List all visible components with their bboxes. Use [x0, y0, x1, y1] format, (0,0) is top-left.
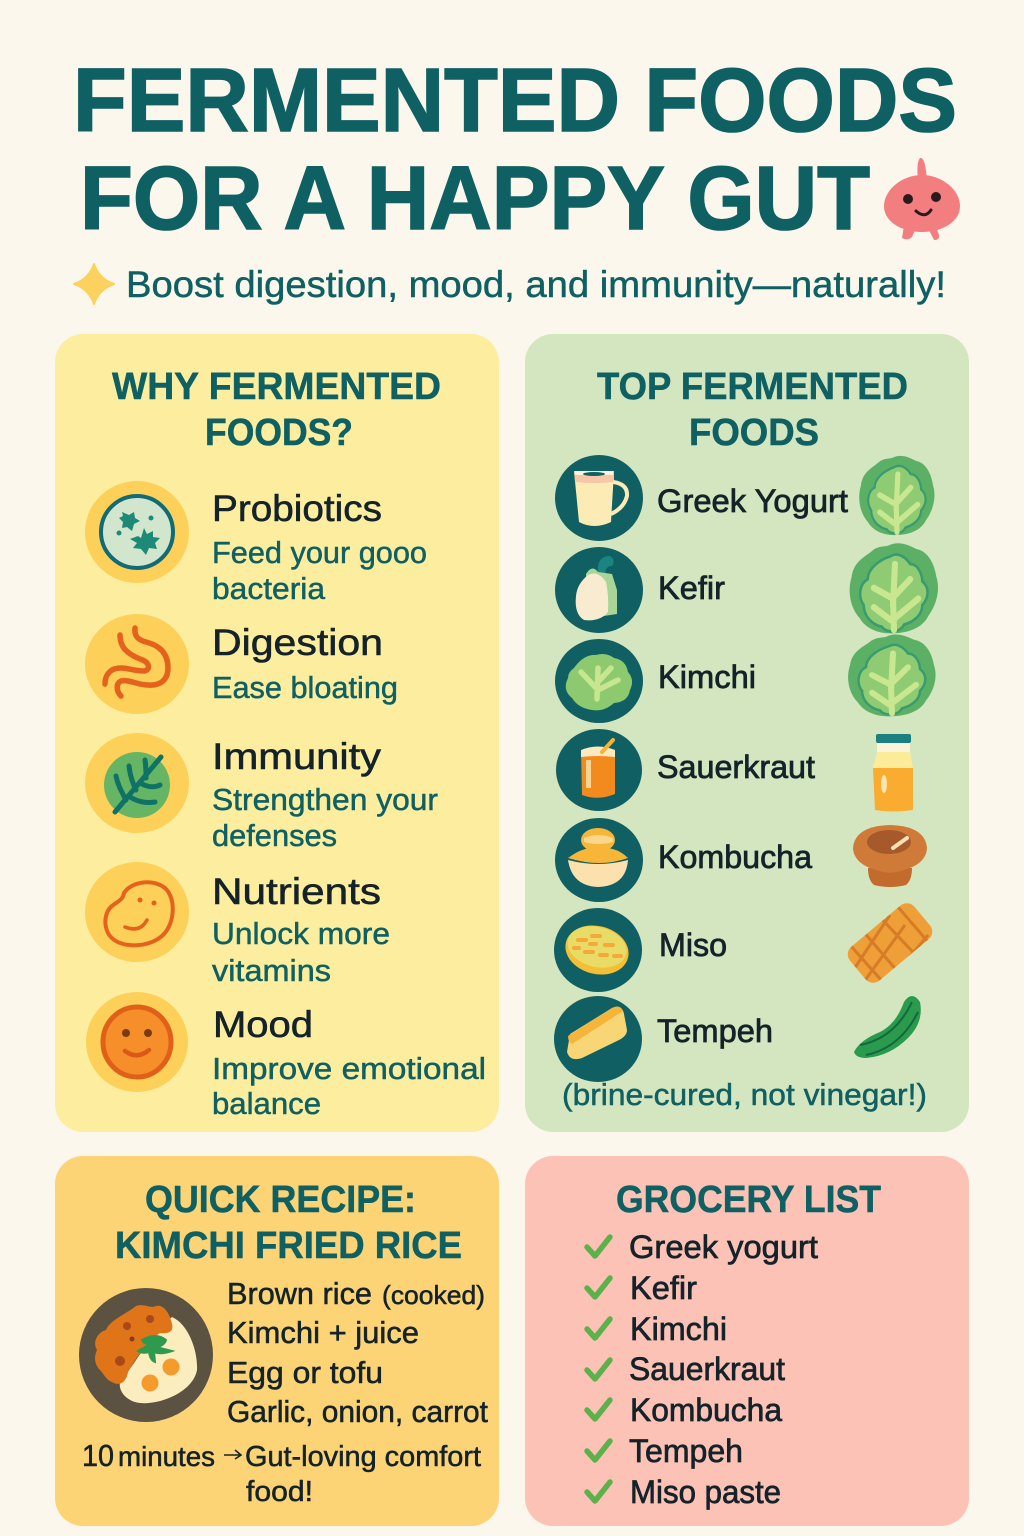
recipe note: food! [246, 1476, 313, 1508]
label: kombucha: Kombucha [658, 839, 812, 875]
text: immunity: defenses [212, 818, 337, 853]
text: probiotics: Feed your gooo [212, 535, 427, 570]
heading: top fermented foods [597, 366, 908, 454]
item: kefir [587, 1270, 697, 1306]
text: nutrients: vitamins [212, 953, 331, 988]
heading: why fermented foods: FOODS? [205, 412, 353, 454]
icon: clay mortar [853, 825, 927, 887]
panel: why fermented foods [55, 334, 499, 1132]
icon: kimchi fried rice plate [79, 1288, 213, 1422]
icon: kombucha bowl [555, 818, 643, 902]
ingredient list: Egg or tofu [227, 1355, 383, 1390]
recipe note: minutes [118, 1441, 215, 1472]
text: digestion [212, 622, 398, 705]
icon: cabbage [859, 456, 934, 535]
ingredient list [227, 1276, 488, 1429]
icon: kimchi cabbage [555, 639, 643, 723]
item: kimchi [587, 1311, 727, 1347]
icon: probiotics petri dish [85, 481, 189, 583]
text: immunity [212, 736, 438, 853]
icon: pickle [854, 996, 921, 1058]
heading: top fermented foods: FOODS [689, 412, 819, 454]
item: miso paste: Miso paste [630, 1474, 781, 1510]
text: mood [212, 1004, 486, 1121]
icon: jar [873, 734, 913, 812]
icon: tempeh block [848, 903, 932, 983]
title: FOR A HAPPY GUT [80, 149, 870, 249]
text: nutrients: Unlock more [212, 916, 390, 951]
text: digestion: Ease bloating [212, 670, 398, 705]
note: brine-cured: (brine-cured, not vinegar!) [562, 1077, 927, 1112]
label: tempeh: Tempeh [657, 1013, 773, 1049]
text: probiotics: Probiotics [212, 488, 382, 529]
panel: grocery list [525, 1156, 969, 1526]
item: sauerkraut: Sauerkraut [629, 1351, 785, 1387]
item: tempeh: Tempeh [629, 1433, 743, 1469]
icon: cabbage [848, 635, 936, 716]
label: miso: Miso [659, 927, 727, 963]
icon: sparkle [74, 264, 114, 304]
icon: cabbage [850, 543, 938, 633]
icon: kefir bottles [555, 547, 643, 633]
text: nutrients [212, 871, 390, 988]
heading: why fermented foods: WHY FERMENTED [112, 366, 441, 408]
icon: smiling gut mascot [884, 158, 960, 240]
title: FERMENTED FOODS [73, 51, 957, 151]
heading: quick recipe: QUICK RECIPE: [145, 1179, 416, 1221]
icon: tempeh slice [554, 996, 642, 1082]
heading: quick recipe [115, 1179, 462, 1267]
label: sauerkraut: Sauerkraut [657, 749, 815, 785]
panel: quick recipe [55, 1156, 499, 1526]
label: kimchi: Kimchi [658, 659, 756, 695]
icon: mood smiley [86, 992, 188, 1092]
icon: digestion intestine [85, 614, 189, 714]
heading: quick recipe: KIMCHI FRIED RICE [115, 1225, 462, 1267]
recipe note [82, 1438, 481, 1508]
ingredient list: Garlic, onion, carrot [227, 1394, 488, 1429]
text: mood: balance [212, 1086, 321, 1121]
icon: sauerkraut glass [556, 729, 642, 811]
text: probiotics: bacteria [212, 571, 326, 606]
text: mood: Improve emotional [212, 1051, 486, 1086]
recipe note: Gut-loving comfort [245, 1441, 481, 1473]
text: digestion: Digestion [212, 622, 383, 663]
title [73, 51, 957, 249]
item: kefir: Kefir [630, 1270, 697, 1306]
panel: top fermented foods [525, 334, 969, 1132]
subtitle: Boost digestion, mood, and immunity—naturally! [126, 264, 946, 305]
text: nutrients: Nutrients [212, 871, 381, 912]
text: immunity: Immunity [212, 736, 382, 777]
text: probiotics [212, 488, 427, 606]
heading: grocery list: GROCERY LIST [616, 1179, 881, 1221]
ingredient list: Kimchi + juice [227, 1315, 419, 1350]
icon: nutrients happy bean [85, 862, 189, 962]
item: kimchi: Kimchi [630, 1311, 727, 1347]
icon: miso patty [554, 908, 642, 992]
icon: greek yogurt mug [555, 455, 643, 541]
ingredient list: (cooked) [382, 1280, 485, 1310]
ingredient list: Brown rice [227, 1276, 372, 1311]
label: greek yogurt: Greek Yogurt [657, 483, 848, 519]
heading: why fermented foods [112, 366, 441, 454]
text: mood: Mood [213, 1004, 313, 1045]
text: immunity: Strengthen your [212, 782, 438, 817]
item: greek yogurt: Greek yogurt [629, 1229, 818, 1265]
icon: immunity leaf [85, 733, 189, 833]
item: kombucha: Kombucha [630, 1392, 782, 1428]
label: kefir: Kefir [658, 570, 725, 606]
heading: top fermented foods: TOP FERMENTED [597, 366, 908, 408]
recipe note: 10 [82, 1438, 114, 1473]
